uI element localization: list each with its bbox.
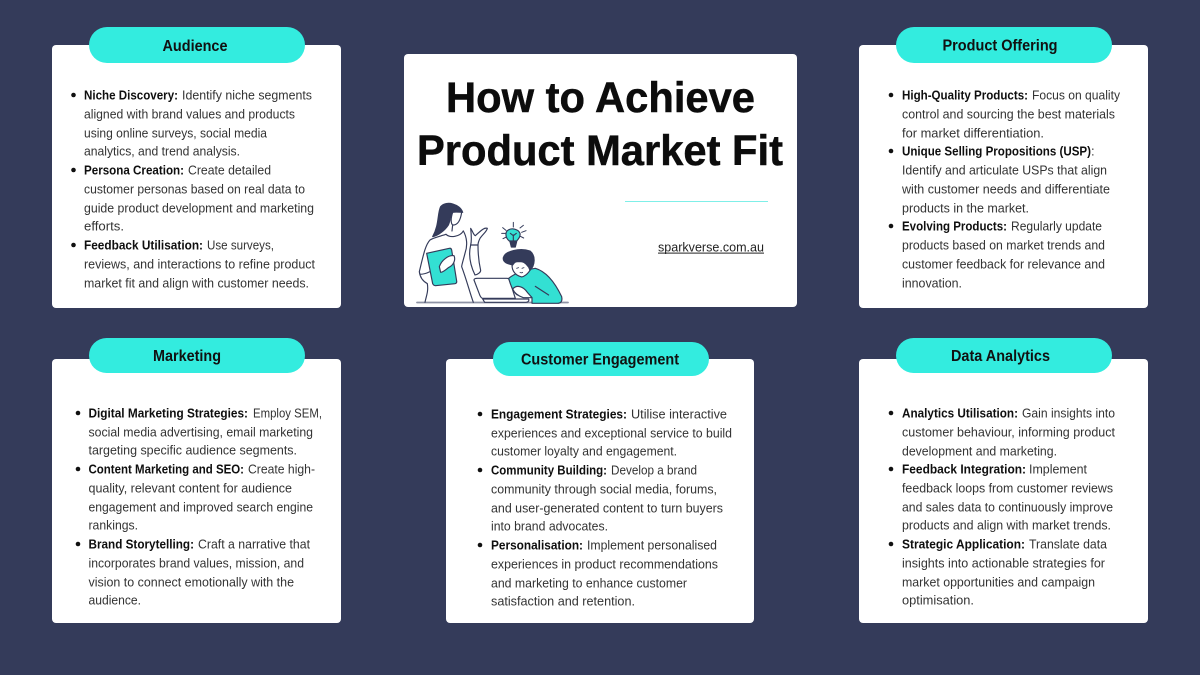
title: Product Market Fit <box>417 127 783 175</box>
hair <box>503 250 534 270</box>
bullet list: audience: reviews, and interactions to refine product <box>84 256 315 272</box>
bullet list: marketing: quality, relevant content for audience <box>88 480 292 496</box>
heading pill: data analytics <box>896 338 1112 373</box>
bullet list: data analytics: development and marketing. <box>902 444 1057 458</box>
heading pill: product offering <box>896 27 1112 63</box>
heading pill: audience <box>89 27 305 63</box>
bullet list: audience: Niche Discovery: <box>84 88 178 102</box>
bullet list: customer engagement: and user-generated content to turn buyers <box>491 500 723 516</box>
panel: data analytics <box>859 338 1148 623</box>
face and neck <box>451 212 462 231</box>
bullet list: audience: efforts. <box>84 218 124 234</box>
hand <box>513 286 532 298</box>
bullet list: marketing: Content Marketing and SEO: <box>88 462 244 476</box>
bullet list: product offering: with customer needs and differentiate <box>901 182 1110 196</box>
bullet list: audience: using online surveys, social media <box>84 126 268 140</box>
bullet list: customer engagement: experiences in product recommendations <box>491 556 718 572</box>
bullet list: data analytics: Implement <box>1029 462 1087 476</box>
panel: product offering <box>859 27 1148 308</box>
bullet list: data analytics: customer behaviour, informing product <box>902 424 1115 440</box>
bullet list: customer engagement: Implement personalised <box>587 538 717 552</box>
bullet list: audience: market fit and align with customer needs. <box>84 276 309 290</box>
panel: title card <box>404 54 797 307</box>
bullet list: customer engagement: Community Building: <box>491 462 607 478</box>
panel: audience <box>52 27 341 308</box>
illustration: two people with laptop and light bulb <box>417 203 568 303</box>
bullet list: marketing: engagement and improved search engine <box>88 500 313 514</box>
body <box>419 231 473 302</box>
bullet list: audience: aligned with brand values and products <box>84 106 295 122</box>
title: How to Achieve <box>446 74 755 122</box>
heading pill: marketing <box>89 338 305 373</box>
bullet list: marketing <box>76 406 322 608</box>
bullet list: data analytics: feedback loops from customer reviews <box>902 480 1113 496</box>
heading pill: customer engagement <box>493 342 709 376</box>
table <box>417 302 568 304</box>
bullet list: customer engagement: community through social media, forums, <box>491 482 717 496</box>
bullet list: product offering: innovation. <box>902 276 962 290</box>
bullet list: data analytics: optimisation. <box>902 592 974 608</box>
bullet list: customer engagement: Utilise interactive <box>631 406 727 422</box>
light bulb <box>502 222 526 247</box>
bullet list: data analytics: Strategic Application: <box>902 536 1025 552</box>
face <box>512 262 533 277</box>
bullet list: data analytics <box>889 406 1115 608</box>
forearm behind tablet <box>420 272 430 274</box>
bullet list: product offering: control and sourcing the best materials <box>902 106 1115 122</box>
bullet list: audience: customer personas based on real data to <box>84 182 305 196</box>
bullet list: marketing: incorporates brand values, mission, and <box>88 556 304 570</box>
bullet list: audience <box>71 88 315 290</box>
bullet list: data analytics: insights into actionable strategies for <box>902 556 1106 570</box>
bullet list: marketing: Create high- <box>248 462 315 476</box>
man with laptop and bulb <box>474 222 562 303</box>
bullet list: audience: Identify niche segments <box>182 88 312 102</box>
laptop <box>474 278 515 298</box>
bullet list: product offering: Evolving Products: <box>902 218 1007 234</box>
bullet list: marketing: Employ SEM, <box>253 406 322 420</box>
bullet list: customer engagement: Engagement Strategies: <box>491 406 627 422</box>
bullet list: product offering: Unique Selling Propositions (USP) <box>902 144 1091 158</box>
bullet list: marketing: social media advertising, email marketing <box>88 424 313 440</box>
bullet list: audience: Persona Creation: <box>84 162 184 178</box>
bullet list: customer engagement: into brand advocates. <box>491 518 608 534</box>
bullet list: marketing: Craft a narrative that <box>198 536 310 552</box>
bullet list: product offering: Regularly update <box>1011 218 1102 234</box>
bullet list: customer engagement: experiences and exceptional service to build <box>491 426 732 440</box>
panel: customer engagement <box>446 342 754 623</box>
heading pill: marketing: Marketing <box>153 348 221 365</box>
bullet list: data analytics: products and align with market trends. <box>902 518 1111 532</box>
heading pill: data analytics: Data Analytics <box>951 348 1050 365</box>
bullet list: data analytics: Analytics Utilisation: <box>902 406 1018 420</box>
heading pill: customer engagement: Customer Engagement <box>521 352 679 368</box>
website link: sparkverse.com.au <box>658 240 764 254</box>
bullet list: marketing: targeting specific audience segments. <box>88 442 297 458</box>
bullet list: product offering: : <box>1091 144 1095 158</box>
bullet list: product offering: customer feedback for relevance and <box>902 256 1105 272</box>
bullet list: product offering: High-Quality Products: <box>902 88 1028 102</box>
bullet list: product offering <box>889 88 1120 290</box>
bullet list: customer engagement: satisfaction and retention. <box>491 594 635 608</box>
bullet list: marketing: Brand Storytelling: <box>88 536 194 552</box>
bullet list: audience: Create detailed <box>188 162 271 178</box>
panel: marketing <box>52 338 341 623</box>
raised arm <box>470 245 481 275</box>
hair <box>433 203 463 237</box>
bullet list: data analytics: Feedback Integration: <box>902 462 1026 476</box>
bullet list: audience: analytics, and trend analysis. <box>84 144 240 158</box>
bullet list: customer engagement: Personalisation: <box>491 538 583 552</box>
bullet list: audience: guide product development and marketing <box>84 200 314 216</box>
bullet list: product offering: for market differentiation. <box>902 126 1044 140</box>
bullet list: customer engagement <box>478 406 732 608</box>
bullet list: product offering: Identify and articulate USPs that align <box>902 162 1107 178</box>
bullet list: customer engagement: and marketing to enhance customer <box>491 576 688 590</box>
bullet list: data analytics: market opportunities and campaign <box>902 574 1095 590</box>
bullet list: product offering: Focus on quality <box>1032 88 1120 102</box>
bullet list: data analytics: Gain insights into <box>1022 406 1115 420</box>
bullet list: product offering: products based on market trends and <box>902 238 1105 252</box>
heading pill: product offering: Product Offering <box>942 38 1058 54</box>
bullet list: customer engagement: Develop a brand <box>611 462 697 478</box>
hand on tablet <box>439 256 455 272</box>
title <box>417 74 783 175</box>
heading pill: audience: Audience <box>162 38 228 55</box>
tablet <box>427 248 457 286</box>
bullet list: customer engagement: customer loyalty and engagement. <box>491 444 677 458</box>
bullet list: marketing: audience. <box>88 592 141 608</box>
bullet list: audience: Feedback Utilisation: <box>84 238 203 252</box>
sweater <box>509 268 562 303</box>
bullet list: data analytics: Translate data <box>1029 536 1108 552</box>
bullet list: audience: Use surveys, <box>207 238 274 252</box>
bullet list: data analytics: and sales data to continuously improve <box>902 500 1113 514</box>
bullet list: marketing: Digital Marketing Strategies: <box>88 406 248 420</box>
bullet list: marketing: rankings. <box>88 518 138 532</box>
bullet list: marketing: vision to connect emotionally with the <box>88 574 294 590</box>
woman with tablet <box>419 203 487 302</box>
bullet list: product offering: products in the market. <box>902 200 1029 216</box>
